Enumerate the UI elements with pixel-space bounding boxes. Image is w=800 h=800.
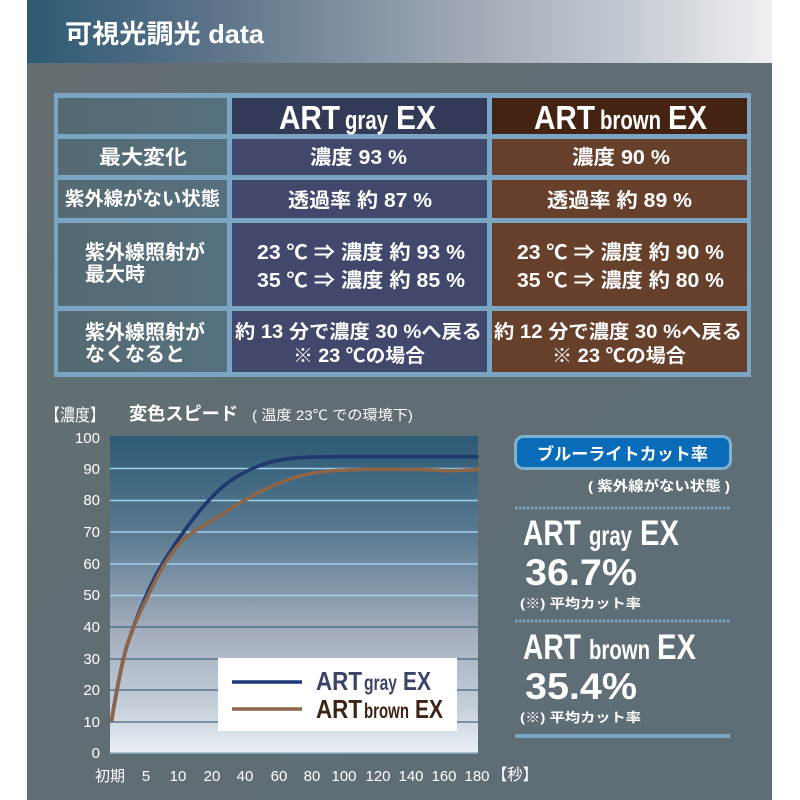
title: 可視光調光 data xyxy=(65,19,265,49)
row: max UV: 23 ℃ ⇒ 濃度 約 90 % xyxy=(517,241,724,264)
stat: ART brown EX xyxy=(520,628,697,725)
legend: ART xyxy=(316,694,362,724)
legend: EX xyxy=(415,694,444,724)
comparison table xyxy=(54,93,751,377)
stat: ART brown EX: brown xyxy=(589,634,650,665)
logo: ART gray EX: gray xyxy=(345,105,388,135)
y axis labels: 10 xyxy=(83,714,100,731)
y axis labels: 100 xyxy=(75,430,100,447)
row: max UV: 23 ℃ ⇒ 濃度 約 93 % xyxy=(257,241,465,264)
y axis labels: 60 xyxy=(83,556,100,573)
legend: gray xyxy=(364,672,397,695)
chart heading: 変色スピード xyxy=(129,403,238,424)
y axis labels: 0 xyxy=(92,745,100,762)
x axis labels: 140 xyxy=(398,768,424,785)
stat: ART gray EX: ART xyxy=(523,514,581,553)
curve: ART gray EX xyxy=(112,457,477,720)
row: after UV removed: 約 13 分で濃度 30 %へ戻る xyxy=(235,321,482,343)
row: max UV: 最大時 xyxy=(85,263,145,286)
row: after UV removed: ※ 23 ℃の場合 xyxy=(552,345,686,367)
note: no UV condition: ( 紫外線がない状態 ) xyxy=(588,478,730,494)
chart heading: ( 温度 23℃ での環境下) xyxy=(252,407,413,423)
x axis labels: 180 xyxy=(464,768,490,785)
x axis labels: 80 xyxy=(304,768,320,785)
row: after UV removed: 紫外線照射が xyxy=(85,320,205,344)
stat: ART brown EX: EX xyxy=(657,628,697,667)
row: no UV xyxy=(58,180,747,218)
header band with title xyxy=(27,0,772,63)
chart heading: 【濃度】 xyxy=(45,406,105,425)
legend: brown xyxy=(364,700,409,723)
y axis labels: 90 xyxy=(83,461,100,478)
legend: EX xyxy=(403,666,432,696)
stat: ART gray EX: (※) 平均カット率 xyxy=(520,596,641,611)
logo: ART gray EX xyxy=(279,99,436,136)
row: max UV: 35 ℃ ⇒ 濃度 約 80 % xyxy=(517,269,724,292)
y axis labels: 20 xyxy=(83,682,100,699)
row: after UV removed: なくなると xyxy=(85,343,185,366)
logo: ART gray EX: ART xyxy=(279,99,340,136)
stat: ART brown EX: 35.4% xyxy=(525,666,637,707)
y axis labels: 30 xyxy=(83,651,100,668)
y axis labels: 80 xyxy=(83,492,100,509)
curve: ART brown EX xyxy=(112,469,478,720)
stat: ART gray EX: EX xyxy=(640,514,680,553)
logo: ART brown EX: EX xyxy=(668,99,707,136)
stat: ART brown EX: (※) 平均カット率 xyxy=(520,710,641,725)
row: after UV removed: ※ 23 ℃の場合 xyxy=(293,345,425,367)
stat: ART gray EX xyxy=(520,514,680,611)
y axis labels xyxy=(75,430,100,762)
row: maximum change xyxy=(58,139,747,175)
row: no UV: 透過率 約 89 % xyxy=(547,189,692,212)
x axis labels: 20 xyxy=(204,768,220,785)
y axis labels: 50 xyxy=(83,587,100,604)
legend: ART xyxy=(316,666,362,696)
x axis labels xyxy=(95,768,490,785)
y axis labels: 70 xyxy=(83,524,100,541)
badge: blue light cut rate: ブルーライトカット率 xyxy=(537,444,708,464)
header row xyxy=(58,98,747,136)
x axis labels: 40 xyxy=(237,768,253,785)
x axis labels: 初期 xyxy=(95,768,125,785)
stat: ART gray EX: 36.7% xyxy=(525,552,637,593)
badge: blue light cut rate xyxy=(516,436,730,468)
logo: ART brown EX: ART xyxy=(534,99,595,136)
stat: ART brown EX: ART xyxy=(523,628,581,667)
logo: ART brown EX: brown xyxy=(600,105,661,135)
row: max UV xyxy=(58,223,747,306)
row: no UV: 透過率 約 87 % xyxy=(288,189,432,212)
x axis labels: 160 xyxy=(431,768,457,785)
row: after UV removed xyxy=(58,311,747,372)
row: max UV: 紫外線照射が xyxy=(85,240,205,264)
x axis unit: 【秒】 xyxy=(492,766,538,784)
x axis labels: 60 xyxy=(271,768,287,785)
row: maximum change: 濃度 93 % xyxy=(310,146,407,169)
x axis labels: 100 xyxy=(331,768,357,785)
line chart: color change speed xyxy=(75,430,538,785)
x axis labels: 5 xyxy=(142,768,150,785)
stat: ART gray EX: gray xyxy=(589,520,632,551)
x axis labels: 10 xyxy=(170,768,186,785)
logo: ART brown EX xyxy=(534,99,707,136)
row: no UV: 紫外線がない状態 xyxy=(65,187,220,210)
row: max UV: 35 ℃ ⇒ 濃度 約 85 % xyxy=(257,269,465,292)
x axis labels: 120 xyxy=(365,768,391,785)
chart heading xyxy=(45,403,413,425)
row: maximum change: 最大変化 xyxy=(99,146,187,169)
legend xyxy=(218,658,457,731)
row: maximum change: 濃度 90 % xyxy=(572,146,670,169)
y axis labels: 40 xyxy=(83,619,100,636)
row: after UV removed: 約 12 分で濃度 30 %へ戻る xyxy=(494,321,742,343)
panel: blue light cut rate xyxy=(515,436,730,736)
logo: ART gray EX: EX xyxy=(396,99,436,136)
